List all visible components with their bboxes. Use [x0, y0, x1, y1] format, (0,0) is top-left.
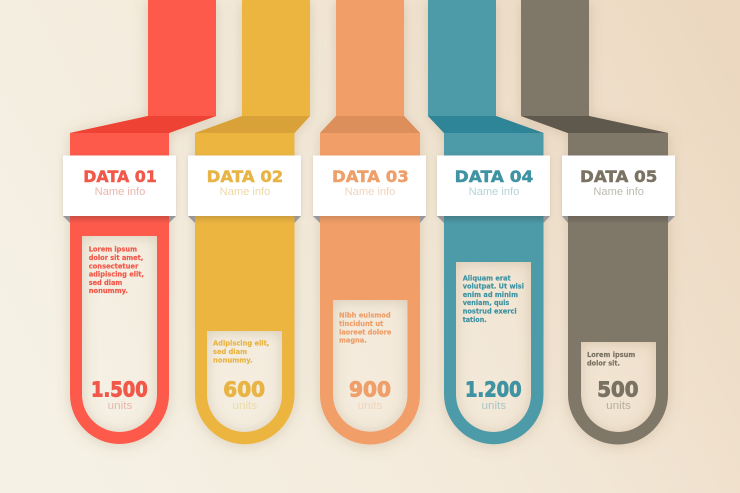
panel: data 04 ribbon	[428, 0, 550, 444]
brown value	[597, 377, 638, 412]
red value: units	[108, 400, 133, 412]
red description text	[89, 246, 144, 295]
red value: 1.500	[91, 377, 148, 401]
teal data card: Name info	[469, 186, 519, 198]
yellow value: units	[232, 400, 258, 412]
orange card fold corners	[313, 216, 426, 223]
brown data card: DATA 05	[580, 167, 657, 186]
brown data card	[562, 156, 675, 216]
orange data card: DATA 03	[332, 167, 409, 186]
teal value: 1.200	[465, 377, 522, 401]
yellow data card: Name info	[220, 186, 270, 198]
orange description text: laoreet dolore	[339, 328, 392, 336]
teal description text: volutpat. Ut wisi	[463, 283, 524, 291]
red value	[91, 377, 148, 412]
brown value: units	[606, 400, 631, 412]
yellow ribbon fold	[195, 116, 310, 133]
brown data card: Name info	[593, 186, 644, 198]
teal card fold corners	[437, 216, 550, 223]
teal value	[465, 377, 522, 412]
brown description text: Lorem ipsum	[587, 351, 635, 359]
brown description text	[587, 351, 635, 367]
red data card: Name info	[95, 186, 145, 198]
brown shade under card	[568, 216, 668, 224]
teal description text: enim ad minim	[463, 291, 518, 299]
orange ribbon body	[320, 0, 420, 444]
orange value: 900	[349, 377, 391, 401]
red ribbon fold	[70, 116, 216, 133]
yellow data card	[188, 156, 301, 216]
panel: data 02 ribbon	[188, 0, 310, 444]
yellow card fold corners	[188, 216, 301, 223]
yellow description text: Adipiscing elit,	[213, 340, 269, 348]
yellow shade under card	[195, 216, 294, 224]
brown value: 500	[597, 377, 638, 401]
orange value	[349, 377, 391, 412]
orange description text: Nibh euismod	[339, 312, 391, 320]
red description text: sed diam	[89, 279, 122, 287]
orange value: units	[358, 400, 383, 412]
teal data card	[437, 156, 550, 216]
teal description text: tation.	[463, 316, 487, 324]
teal ribbon body	[428, 0, 544, 444]
orange data card	[313, 156, 426, 216]
orange ribbon fold	[320, 116, 420, 133]
teal description text: veniam, quis	[463, 299, 509, 307]
yellow data card: DATA 02	[207, 167, 283, 186]
teal description text: Aliquam erat	[463, 274, 511, 282]
panel: data 05 ribbon	[521, 0, 675, 444]
teal shade under card	[444, 216, 544, 224]
brown ribbon fold	[521, 116, 668, 133]
red description text: Lorem ipsum	[89, 246, 137, 254]
teal ribbon fold	[428, 116, 544, 133]
red shade under card	[70, 216, 169, 224]
red data card: DATA 01	[83, 167, 157, 186]
red description text: nonummy.	[89, 287, 128, 295]
red data card	[63, 156, 176, 216]
orange data card: Name info	[345, 186, 395, 198]
yellow ribbon body	[195, 0, 310, 444]
teal description text: nostrud exerci	[463, 308, 517, 316]
yellow description text: sed diam	[213, 348, 247, 356]
brown description text: dolor sit.	[587, 359, 620, 367]
teal description text	[463, 274, 524, 324]
panel: data 03 ribbon	[313, 0, 426, 444]
red ribbon body	[70, 0, 216, 444]
brown card fold corners	[562, 216, 675, 223]
brown ribbon body	[521, 0, 668, 444]
red card fold corners	[63, 216, 176, 223]
yellow value	[223, 377, 265, 412]
yellow value: 600	[223, 377, 265, 401]
red description text: adipiscing elit,	[89, 271, 144, 279]
red description text: consectetuer	[89, 262, 139, 270]
orange shade under card	[320, 216, 420, 224]
orange description text	[339, 312, 392, 345]
orange description text: tincidunt ut	[339, 320, 384, 328]
panel: data 01 ribbon	[63, 0, 216, 444]
teal value: units	[482, 400, 507, 412]
yellow description text: nonummy.	[213, 356, 253, 364]
orange description text: magna.	[339, 337, 367, 345]
yellow description text	[213, 340, 269, 364]
red description text: dolor sit amet,	[89, 254, 143, 262]
teal data card: DATA 04	[455, 167, 533, 186]
